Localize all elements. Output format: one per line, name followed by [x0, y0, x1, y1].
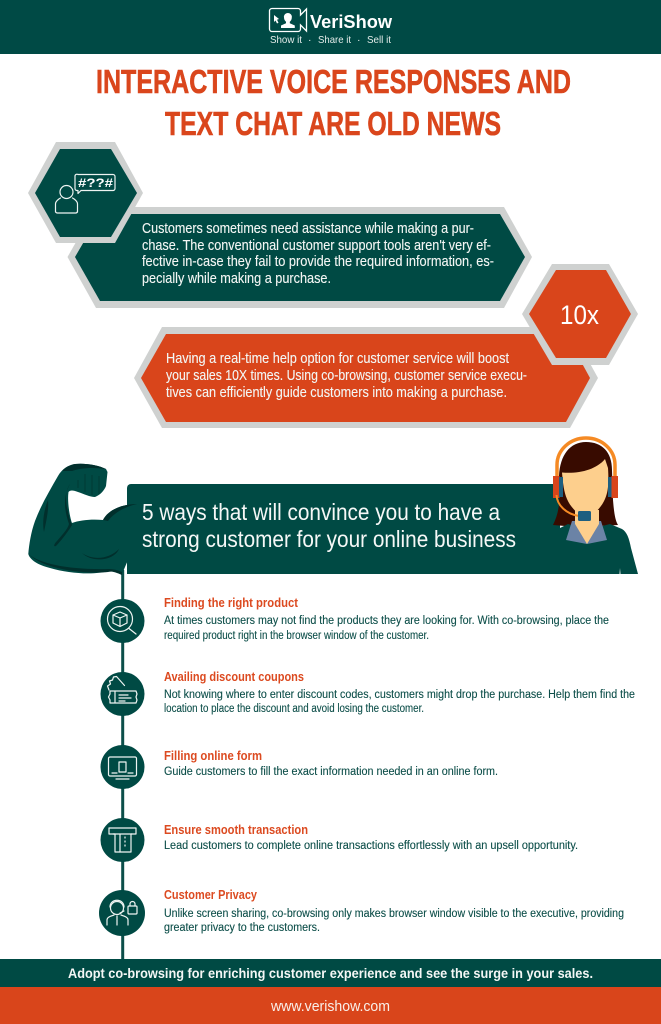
step 1: finding the right product: Finding the right product [164, 596, 299, 610]
panel text: Having a real-time help option for customer service will boost [166, 351, 509, 367]
icon: VeriShow logo [270, 8, 306, 32]
logo wordmark: VeriShow [310, 12, 393, 32]
step body: Lead customers to complete online transactions effortlessly with an upsell opportunity. [164, 840, 578, 852]
step 5: customer privacy [99, 888, 624, 936]
footer call to action: Adopt co-browsing for enriching customer experience and see the surge in your sales. [68, 965, 593, 981]
panel text: chase. The conventional customer support tools aren't very ef- [142, 238, 491, 254]
panel: 10x sales boost [134, 327, 598, 428]
footer call to action [0, 959, 661, 987]
icon: agent with padlock [99, 890, 145, 936]
headset [557, 438, 615, 477]
collar [566, 521, 607, 544]
step 2: availing discount coupons: Availing discount coupons [164, 670, 304, 684]
title: TEXT CHAT ARE OLD NEWS [165, 105, 501, 142]
panel text: pecially while making a purchase. [142, 271, 331, 287]
step 5: customer privacy: Customer Privacy [164, 888, 257, 902]
neck [575, 510, 599, 544]
tagline [270, 34, 391, 46]
icon: product search [100, 599, 144, 643]
banner heading text: 5 ways that will convince you to have a [142, 499, 500, 525]
step body: At times customers may not find the products they are looking for. With co-browsing, place the [164, 615, 609, 627]
icon: person with speech bubble: #??# [78, 176, 113, 190]
step body [164, 908, 624, 934]
step body: Guide customers to fill the exact information needed in an online form. [164, 766, 498, 778]
timeline line [121, 570, 124, 962]
footer website [0, 987, 661, 1024]
step 4: ensure smooth transaction: Ensure smooth transaction [164, 823, 308, 837]
banner heading text [142, 499, 516, 552]
panel: customer support problem [68, 207, 532, 308]
illustration: support agent with headset [552, 438, 638, 574]
panel text: your sales 10X times. Using co-browsing, customer service execu- [166, 368, 527, 384]
icon: flexed bicep [28, 464, 137, 575]
step body: location to place the discount and avoid losing the customer. [164, 703, 424, 715]
step 3: filling online form [100, 745, 498, 789]
step 2: availing discount coupons [100, 670, 635, 716]
banner: 5 ways heading [127, 484, 560, 574]
step 4: ensure smooth transaction [100, 818, 578, 862]
hexagon: confused customer icon [28, 142, 143, 243]
title [96, 63, 571, 142]
icon: card machine [100, 818, 144, 862]
tagline: Share it [318, 34, 351, 46]
tagline: Show it [270, 34, 302, 46]
tagline: · [308, 34, 312, 46]
step body [164, 689, 635, 715]
panel text: tives can efficiently guide customers into making a purchase. [166, 385, 507, 401]
panel text: fective in-case they fail to provide the required information, es- [142, 254, 494, 270]
step body: Not knowing where to enter discount codes, customers might drop the purchase. Help them find the [164, 689, 635, 701]
tagline: · [357, 34, 360, 46]
shirt [552, 524, 638, 574]
step 1: finding the right product [100, 596, 609, 643]
hexagon: 10x [522, 264, 638, 365]
panel text [142, 221, 494, 287]
header bar [0, 0, 661, 54]
tagline: Sell it [367, 34, 391, 46]
step 3: filling online form: Filling online form [164, 749, 262, 763]
step body [164, 615, 609, 642]
muscle shading [28, 464, 137, 575]
panel text: Customers sometimes need assistance while making a pur- [142, 221, 474, 237]
icon: coupons [100, 672, 144, 716]
step body: Unlike screen sharing, co-browsing only makes browser window visible to the executive, providing [164, 908, 624, 920]
face [562, 459, 608, 516]
banner heading text: strong customer for your online business [142, 526, 516, 552]
hexagon: 10x: 10x [560, 300, 599, 330]
step body: greater privacy to the customers. [164, 922, 320, 934]
panel text [166, 351, 527, 401]
hair back [553, 442, 618, 526]
icon: form on screen [100, 745, 144, 789]
step body: required product right in the browser window of the customer. [164, 630, 429, 642]
footer website: www.verishow.com [270, 999, 390, 1015]
